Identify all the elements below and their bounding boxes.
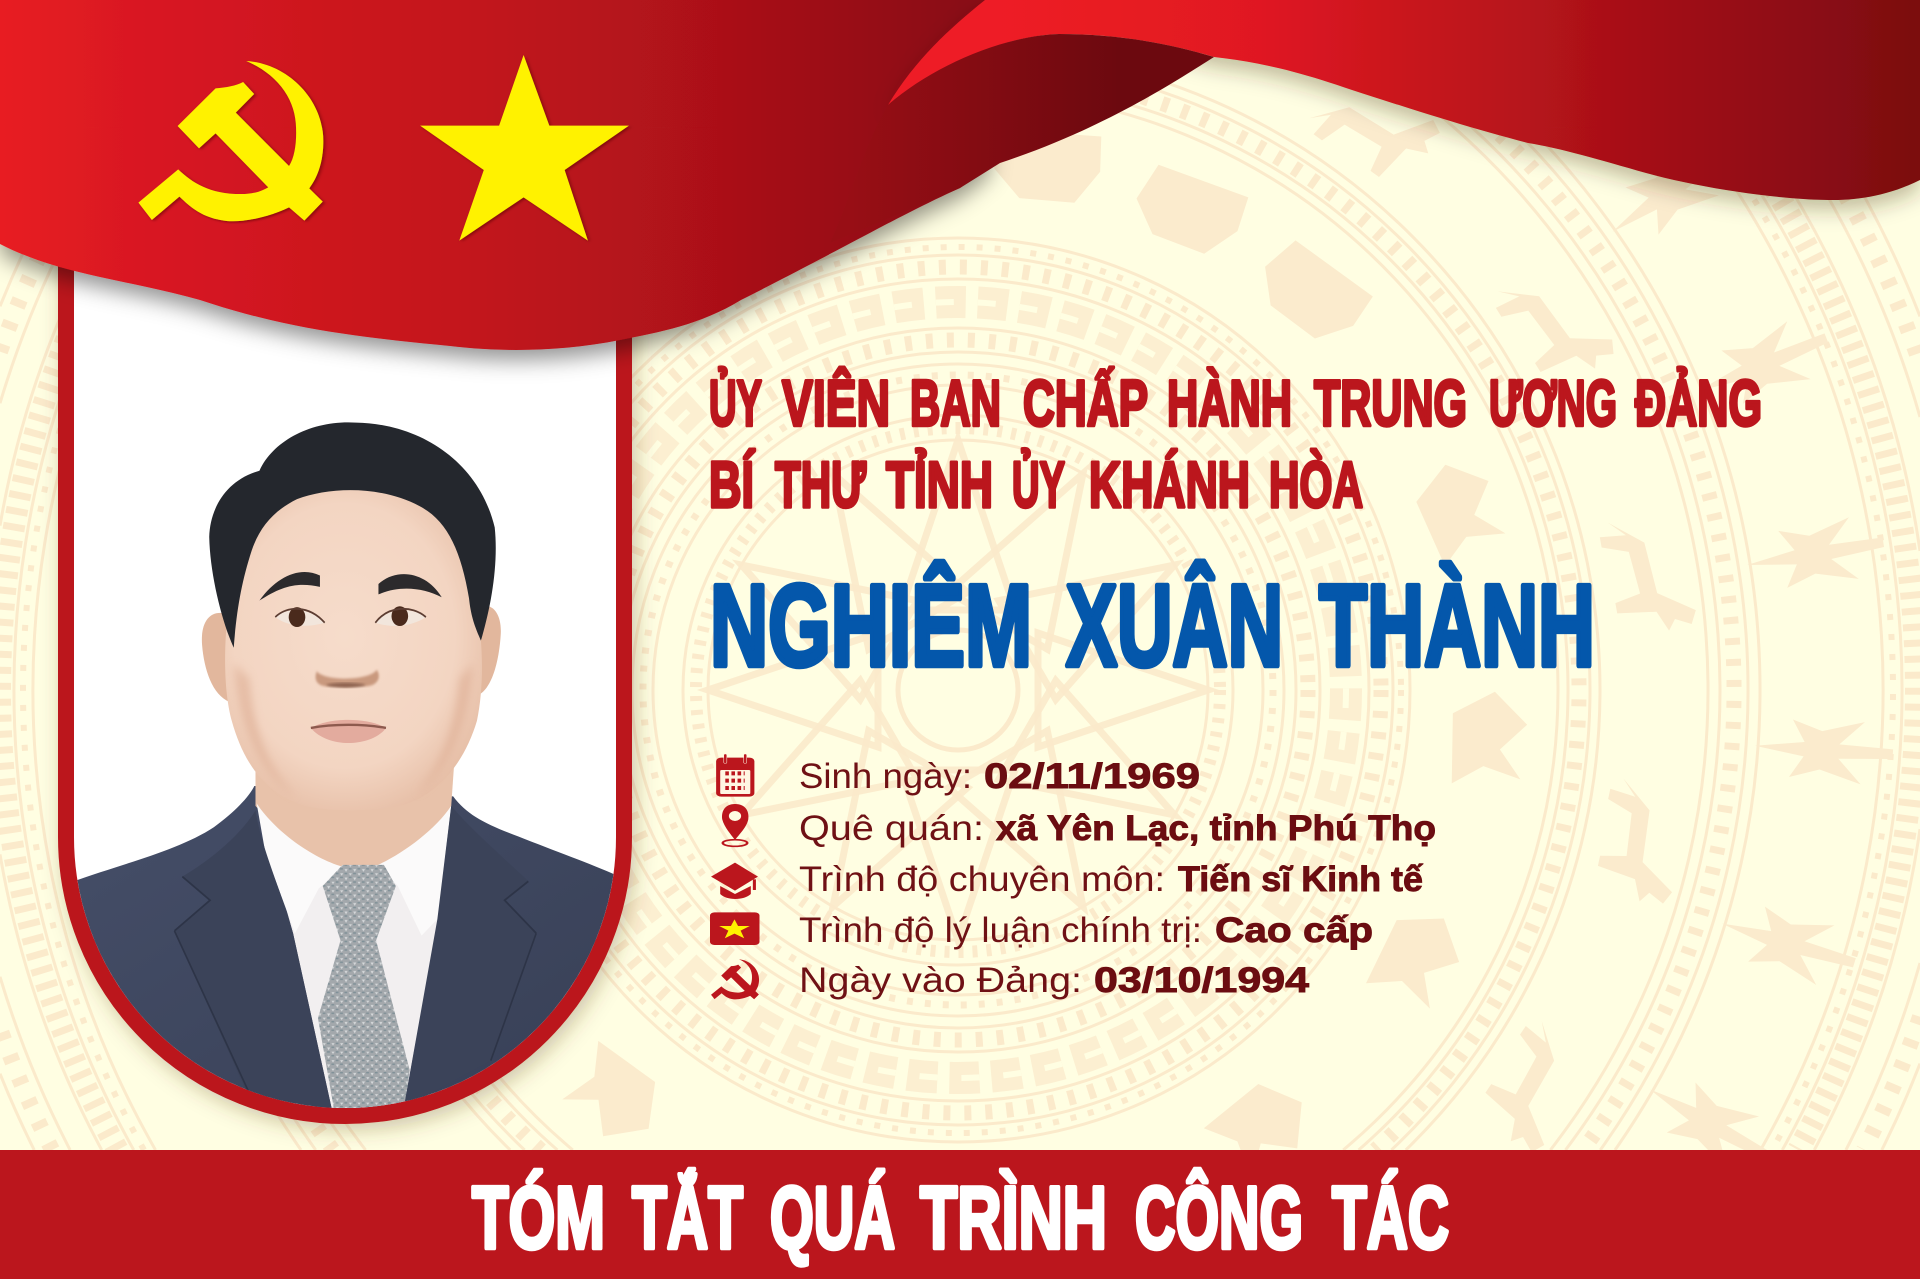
heading: position titles: TỈNH — [886, 448, 993, 521]
heading: position titles: CHẤP — [1023, 366, 1148, 440]
icon: hammer and sickle small — [711, 959, 759, 999]
footer heading: TRÌNH — [920, 1168, 1107, 1267]
heading: position titles: BAN — [910, 366, 1001, 440]
icons column — [710, 754, 759, 945]
mouth — [311, 720, 386, 743]
heading: position titles: THƯ — [775, 448, 866, 521]
heading: position titles: HÀNH — [1167, 366, 1292, 440]
info: professional degree — [799, 860, 1424, 899]
info: political theory level — [799, 911, 1373, 950]
info: hometown: Quê quán: — [799, 809, 984, 848]
emblem: yellow star — [420, 55, 629, 241]
flag: main red drape — [0, 0, 990, 350]
shirt — [286, 806, 452, 1108]
heading: person name: XUÂN — [1066, 560, 1283, 690]
eyebrows — [259, 572, 442, 601]
heading: position titles: ĐẢNG — [1635, 366, 1762, 440]
heading: person name — [710, 560, 1595, 690]
info: date of birth: 02/11/1969 — [984, 757, 1200, 796]
heading: person name: THÀNH — [1319, 560, 1595, 690]
info: party join date: Ngày vào Đảng: — [799, 961, 1082, 1000]
hair — [209, 422, 496, 648]
ears — [202, 613, 230, 702]
heading: position titles: BÍ — [709, 448, 755, 521]
info: date of birth — [799, 757, 1200, 796]
face — [225, 480, 482, 810]
footer heading — [472, 1168, 1449, 1267]
eyes — [275, 610, 426, 626]
necktie — [318, 865, 410, 1113]
heading: position titles: VIÊN — [782, 366, 890, 440]
heading: position titles — [709, 366, 1762, 521]
info: professional degree: Trình độ chuyên môn: — [799, 860, 1165, 899]
nose — [316, 670, 379, 686]
icon: map pin — [722, 804, 748, 846]
shirt collar — [257, 803, 451, 936]
icon: national flag — [710, 912, 759, 945]
heading: position titles: KHÁNH — [1089, 448, 1250, 521]
heading: position titles: ỦY — [1012, 448, 1065, 521]
heading: position titles: ỦY — [709, 366, 762, 440]
info: professional degree: Tiến sĩ Kinh tế — [1178, 860, 1424, 899]
info list — [799, 757, 1436, 1000]
neck — [256, 768, 454, 866]
portrait frame — [66, 240, 624, 1116]
footer heading: TÓM — [472, 1168, 605, 1267]
heading: person name: NGHIÊM — [710, 560, 1032, 690]
info: date of birth: Sinh ngày: — [799, 757, 972, 796]
footer heading: TẮT — [632, 1168, 743, 1267]
flag: upper right wave — [888, 0, 1920, 200]
footer heading: QUÁ — [770, 1168, 895, 1267]
heading: position titles: ƯƠNG — [1489, 366, 1617, 440]
cheek shading — [233, 667, 473, 780]
heading: position titles: HÒA — [1269, 448, 1363, 521]
info: political theory level: Trình độ lý luận chính trị: — [799, 911, 1202, 950]
suit jacket — [78, 786, 614, 1108]
footer banner — [0, 1150, 1920, 1279]
emblem: hammer and sickle — [138, 61, 323, 221]
info: party join date: 03/10/1994 — [1094, 961, 1310, 1000]
footer heading: TÁC — [1332, 1168, 1449, 1267]
portrait photo — [74, 422, 617, 1146]
jacket lapels — [174, 811, 333, 1113]
icon: graduation cap — [711, 863, 758, 899]
icon: calendar — [716, 754, 754, 797]
info: political theory level: Cao cấp — [1215, 911, 1373, 950]
footer heading: CÔNG — [1135, 1168, 1303, 1267]
heading: position titles: TRUNG — [1314, 366, 1467, 440]
flag: dark fold — [830, 34, 1214, 243]
info: hometown — [799, 809, 1436, 848]
info: party join date — [799, 961, 1310, 1000]
info: hometown: xã Yên Lạc, tỉnh Phú Thọ — [996, 809, 1436, 848]
